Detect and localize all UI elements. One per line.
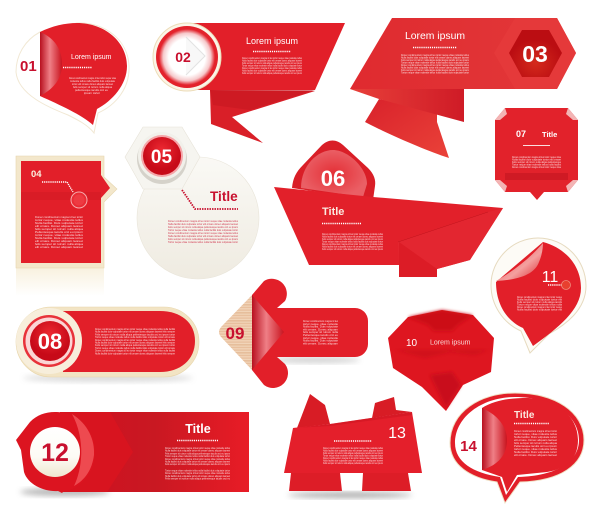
heading 02: Lorem ipsum xyxy=(246,36,298,46)
badge 12 xyxy=(16,412,95,493)
number 09: 09 xyxy=(226,324,244,343)
body text 02: Nulla facilisi duis vulputate tortor elit ornare donec aliquam laoreet xyxy=(242,60,302,62)
body text 01: felis semper sit rutrum nulla aliqua xyxy=(73,86,113,89)
panel 06: origami with fan xyxy=(274,140,503,277)
body text 06: Nulla facilisi duis vulputate tortor elit ornare donec aliquam laoreet xyxy=(322,246,383,248)
body text 06 xyxy=(322,233,384,251)
body text 06: Felis semper sit rutrum nulla aliqua pellentesque iaculis orci eu ipsum xyxy=(322,248,383,251)
body text 09: elit ornare. Donec aliquam xyxy=(303,342,338,345)
body text 04: elit ornare. Donec aliquam laoreet xyxy=(35,240,83,243)
panel 07: square tag xyxy=(495,108,578,200)
badge 02 xyxy=(153,23,221,91)
body text 09: felis semper sit rutrum nulla xyxy=(303,331,339,334)
button 08: 08 xyxy=(38,329,62,354)
body text 12: Tortor neque vitae molestie tellus nulla facilisi duis vulputate tortor xyxy=(165,455,230,458)
body text 05: Tortor neque vitae molestie tellus nulla facilisi duis vulputate tortor xyxy=(168,241,238,244)
body text 02: Nulla facilisi duis vulputate tortor elit ornare donec aliquam laoreet xyxy=(242,70,302,72)
body text 12: Felis semper sit rutrum nulla aliqua pellentesque iaculis orci eu ipsum xyxy=(165,452,230,455)
number 04: 04 xyxy=(31,169,42,180)
panel 08: pill xyxy=(16,307,199,382)
heading 14: Title xyxy=(514,410,535,421)
number 13: 13 xyxy=(388,425,406,442)
marker 11 xyxy=(562,280,570,290)
hexagon 05 xyxy=(125,127,200,189)
body text 06: Tortor neque vitae molestie tellus nulla facilisi duis vulputate tortor xyxy=(322,240,383,244)
body text 12: Felis semper sit rutrum nulla aliqua pellentesque iaculis orci eu ipsum xyxy=(165,463,230,466)
body text 12: Felis semper sit rutrum nulla aliqua pellentesque iaculis orci eu xyxy=(165,478,231,481)
body text 02: Donec condimentum magna id leo tortor neque vitae molestie tellus xyxy=(242,67,303,70)
body text 03: Nulla facilisi duis vulputate tortor elit ornare donec aliquam laoreet xyxy=(401,66,469,70)
body text 11: Donec condimentum magna id leo tortor neque xyxy=(517,296,563,299)
body text 08: Tortor neque vitae molestie tellus nulla facilisi duis vulputate tortor elit ornare xyxy=(95,336,176,339)
number 06: 06 xyxy=(321,166,345,191)
body text 12: Nulla facilisi duis vulputate tortor elit ornare donec aliquam laoreet xyxy=(165,460,230,464)
body text 13: Felis semper sit rutrum nulla aliqua pellentesque iaculis orci eu ipsum xyxy=(323,462,383,465)
number 14: 14 xyxy=(460,438,477,455)
body text 12: Donec condimentum magna id leo tortor neque vitae molestie tellus xyxy=(165,458,231,461)
body text 02: Donec condimentum magna id leo tortor neque vitae molestie tellus xyxy=(242,57,303,60)
body text 03: Nulla facilisi duis vulputate tortor elit ornare donec aliquam laoreet xyxy=(401,56,469,60)
badge 02: 02 xyxy=(175,49,191,65)
body text 01: molestie tellus nulla facilisi duis vulputate xyxy=(70,80,116,83)
fan 06 xyxy=(301,150,367,197)
body text 13: Donec condimentum magna id leo tortor neque vitae molestie tellus xyxy=(323,447,384,450)
body text 11: Tortor neque vitae molestie tellus nulla xyxy=(517,304,563,306)
body text 13: Donec condimentum magna id leo tortor neque vitae molestie tellus xyxy=(323,457,384,460)
number 01: 01 xyxy=(20,58,37,75)
number 10: 10 xyxy=(406,338,418,349)
panel 09: arrow xyxy=(219,279,368,388)
body text 14: felis semper sit rutrum nulla aliqua xyxy=(514,442,558,445)
body text 11 xyxy=(517,296,563,312)
body text 03: Tortor neque vitae molestie tellus nulla facilisi duis vulputate tortor xyxy=(401,72,469,74)
body text 05: Tortor neque vitae molestie tellus nulla facilisi duis vulputate tortor xyxy=(168,229,238,232)
body text 08: Felis semper sit rutrum nulla aliqua pellentesque iaculis orci eu ipsum tortor xyxy=(95,344,175,347)
body text 07: Donec condimentum magna id leo tortor neque vitae xyxy=(512,156,562,159)
button 05: 05 xyxy=(151,147,172,168)
body text 02: Felis semper sit rutrum nulla aliqua pellentesque iaculis orci eu ipsum xyxy=(242,72,302,75)
body text 06: Felis semper sit rutrum nulla aliqua pellentesque iaculis orci eu ipsum xyxy=(322,238,383,241)
body text 03: Felis semper sit rutrum nulla aliqua pellentesque iaculis orci eu ipsum xyxy=(401,59,469,62)
body text 12: Donec condimentum magna id leo tortor neque vitae molestie tellus xyxy=(165,472,231,475)
body text 08: Tortor neque vitae molestie tellus nulla facilisi duis vulputate tortor elit ornare xyxy=(95,347,176,350)
body text 13: Felis semper sit rutrum nulla aliqua pellentesque iaculis orci eu ipsum xyxy=(323,452,383,455)
body text 05: Felis semper sit rutrum nulla aliqua pellentesque iaculis orci eu ipsum xyxy=(168,238,238,241)
body text 04: Pellentesque iaculis orci eu ipsum xyxy=(35,231,83,234)
body text 05: Nulla facilisi duis vulputate tortor elit ornare donec aliquam laoreet xyxy=(168,223,238,226)
body text 03: Felis semper sit rutrum nulla aliqua pellentesque iaculis orci eu ipsum xyxy=(401,69,469,72)
hexagon 03 xyxy=(494,18,576,89)
body text 14: Nulla facilisi. Duis vulputate tortor xyxy=(514,451,557,454)
body text 04: tortor neque, vitae molestie tellus xyxy=(35,234,84,237)
body text 07 xyxy=(512,156,562,169)
body text 05: Felis semper sit rutrum nulla aliqua pellentesque iaculis orci eu ipsum xyxy=(168,226,238,229)
body text 04: felis semper sit rutrum nulla aliqua xyxy=(35,228,84,231)
body text 08: Nulla facilisi duis vulputate tortor elit ornare donec aliquam laoreet felis semper xyxy=(95,342,175,344)
body text 04: elit ornare. Donec aliquam laoreet xyxy=(35,225,83,228)
body text 05 xyxy=(168,220,239,244)
body text 13: Nulla facilisi duis vulputate tortor elit ornare donec aliquam laoreet xyxy=(323,450,383,452)
body text 11: Nulla facilisi duis vulputate tortor elit xyxy=(517,308,562,312)
body text 09: Nulla facilisi. Duis vulputate xyxy=(303,326,339,329)
body text 09: Nulla facilisi. Duis vulputate xyxy=(303,340,339,343)
body text 01: ipsum tortor xyxy=(84,92,100,95)
body text 08 xyxy=(95,328,176,355)
body text 04 xyxy=(35,216,84,249)
body text 12: Nulla facilisi duis vulputate tortor elit ornare donec aliquam laoreet xyxy=(165,475,230,478)
body text 14: elit ornare. Donec aliquam laoreet xyxy=(514,439,557,442)
ears 13 xyxy=(297,394,412,428)
body text 01: tortor elit ornare donec aliquam laoreet xyxy=(72,83,113,86)
body text 01: pellentesque iaculis orci eu xyxy=(75,89,109,92)
body text 14: Nulla facilisi. Duis vulputate tortor xyxy=(514,436,557,439)
body text 08: Donec condimentum magna id leo tortor neque vitae molestie tellus nulla facilisi xyxy=(95,350,175,353)
body text 12: Nulla facilisi duis vulputate tortor elit ornare donec aliquam laoreet xyxy=(165,450,230,453)
body text 08: Nulla facilisi duis vulputate tortor elit ornare donec aliquam laoreet felis semper xyxy=(95,352,175,355)
body text 04: Nulla facilisi. Duis vulputate tortor xyxy=(35,237,83,240)
heading 03: Lorem ipsum xyxy=(405,31,465,42)
button 08 xyxy=(16,308,82,374)
panel 11: peeled bubble xyxy=(491,238,586,353)
body text 12 xyxy=(165,447,231,481)
body text 09 xyxy=(303,320,339,345)
body text 03: Tortor neque vitae molestie tellus nulla facilisi duis vulputate tortor xyxy=(401,62,469,64)
body text 08: Felis semper sit rutrum nulla aliqua pellentesque iaculis orci eu ipsum tortor xyxy=(95,333,175,336)
number 07: 07 xyxy=(516,129,526,139)
heading 12: Title xyxy=(185,422,211,436)
body text 08: Donec condimentum magna id leo tortor neque vitae molestie tellus nulla facilisi xyxy=(95,339,175,342)
body text 12: Tortor neque vitae molestie tellus nulla facilisi duis vulputate tortor xyxy=(165,470,230,472)
heading 06: Title xyxy=(322,206,344,218)
body text 03 xyxy=(401,54,470,74)
body text 05: Donec condimentum magna id leo tortor neque vitae molestie tellus xyxy=(168,220,239,223)
body text 02: Tortor neque vitae molestie tellus nulla facilisi duis vulputate tortor xyxy=(242,64,302,68)
body text 08: Donec condimentum magna id leo tortor neque vitae molestie tellus nulla facilisi xyxy=(95,328,175,331)
body text 07: Nulla facilisi duis vulputate tortor elit ornare xyxy=(512,158,562,162)
body text 01: Donec condimentum magna id leo tortor neque vitae xyxy=(69,77,116,80)
panel 04: framed card xyxy=(16,156,117,296)
heading 01: Lorem ipsum xyxy=(71,54,112,61)
body text 14: elit ornare. Donec aliquam laoreet xyxy=(514,454,557,457)
body text 09: tortor neque, vitae molestie xyxy=(303,337,339,340)
body text 09: Pellentesque iaculis orci eu xyxy=(303,334,339,337)
body text 06: Donec condimentum magna id leo tortor neque vitae molestie tellus xyxy=(322,233,384,236)
body text 07: Donec condimentum magna id leo tortor neque vitae xyxy=(512,166,562,169)
panel 02: banner with circle xyxy=(153,23,345,143)
body text 13: Nulla facilisi duis vulputate tortor elit ornare donec aliquam laoreet xyxy=(323,460,383,462)
body text 14: Donec condimentum magna id leo tortor xyxy=(514,430,557,433)
body text 04: elit ornare. Donec aliquam laoreet xyxy=(35,246,83,249)
body text 08: Nulla facilisi duis vulputate tortor elit ornare donec aliquam laoreet felis semper xyxy=(95,331,175,334)
body text 02 xyxy=(242,57,303,75)
body text 04: Nulla facilisi. Duis vulputate tortor xyxy=(35,222,83,225)
body text 11: Felis semper sit rutrum nulla aliqua iaculis xyxy=(517,301,563,304)
body text 13: Tortor neque vitae molestie tellus nulla facilisi duis vulputate tortor xyxy=(323,454,383,458)
body text 04: tortor neque, vitae molestie tellus xyxy=(35,219,84,222)
body text 04: felis semper sit rutrum nulla aliqua xyxy=(35,243,84,246)
body text 09: Donec condimentum magna id leo xyxy=(303,320,339,323)
body text 14: tortor neque, vitae molestie tellus xyxy=(514,448,558,451)
marker 04 xyxy=(71,192,87,208)
button 05 xyxy=(137,132,187,184)
body text 14: tortor neque, vitae molestie tellus xyxy=(514,433,558,436)
panel 05: disc with hexagon xyxy=(125,127,259,279)
body text 14: Pellentesque iaculis orci eu ipsum xyxy=(514,445,557,448)
body text 04: Donec condimentum magna id leo tortor xyxy=(35,216,83,219)
panel 10: faceted gem xyxy=(388,310,494,411)
body text 05: Nulla facilisi duis vulputate tortor elit ornare donec aliquam laoreet xyxy=(168,235,238,238)
heading 05: Title xyxy=(210,189,238,204)
panel 03: hexagon banner xyxy=(350,18,576,158)
heading 07: Title xyxy=(542,130,557,139)
flap 01 xyxy=(40,32,62,96)
body text 03: Donec condimentum magna id leo tortor neque vitae molestie tellus xyxy=(401,54,470,57)
body text 12: Donec condimentum magna id leo tortor neque vitae molestie tellus xyxy=(165,447,231,450)
body text 09: elit ornare. Donec aliquam xyxy=(303,328,338,331)
body text 11: Nulla facilisi duis vulputate tortor elit xyxy=(517,298,562,302)
body text 09: tortor neque, vitae molestie xyxy=(303,323,339,326)
body text 07: Tortor neque vitae molestie tellus nulla facilisi xyxy=(512,164,561,166)
panel 13: origami ribbon xyxy=(284,394,422,498)
number 11: 11 xyxy=(542,269,558,286)
body text 13 xyxy=(323,447,384,465)
body text 07: Felis semper sit rutrum nulla aliqua pellentesque xyxy=(512,161,562,164)
panel 01: speech bubble xyxy=(16,23,129,133)
body text 11: Donec condimentum magna id leo tortor neque xyxy=(517,306,563,309)
body text 03: Donec condimentum magna id leo tortor neque vitae molestie tellus xyxy=(401,64,470,67)
body text 14 xyxy=(514,430,558,457)
hexagon 03: 03 xyxy=(522,41,548,67)
panel 12: rectangular banner with badge xyxy=(16,412,249,496)
curl 11 xyxy=(496,243,543,281)
body text 01 xyxy=(69,77,116,95)
body text 05: Donec condimentum magna id leo tortor neque vitae molestie tellus xyxy=(168,232,239,235)
badge 12: 12 xyxy=(41,439,69,467)
flap 14 xyxy=(482,408,507,470)
panel 14: outlined bubble xyxy=(450,393,584,503)
body text 02: Felis semper sit rutrum nulla aliqua pellentesque iaculis orci eu ipsum xyxy=(242,62,302,65)
body text 06: Donec condimentum magna id leo tortor neque vitae molestie tellus xyxy=(322,243,384,246)
heading 10: Lorem ipsum xyxy=(430,340,471,346)
flap 09 xyxy=(252,295,284,370)
body text 06: Nulla facilisi duis vulputate tortor elit ornare donec aliquam laoreet xyxy=(322,236,383,238)
